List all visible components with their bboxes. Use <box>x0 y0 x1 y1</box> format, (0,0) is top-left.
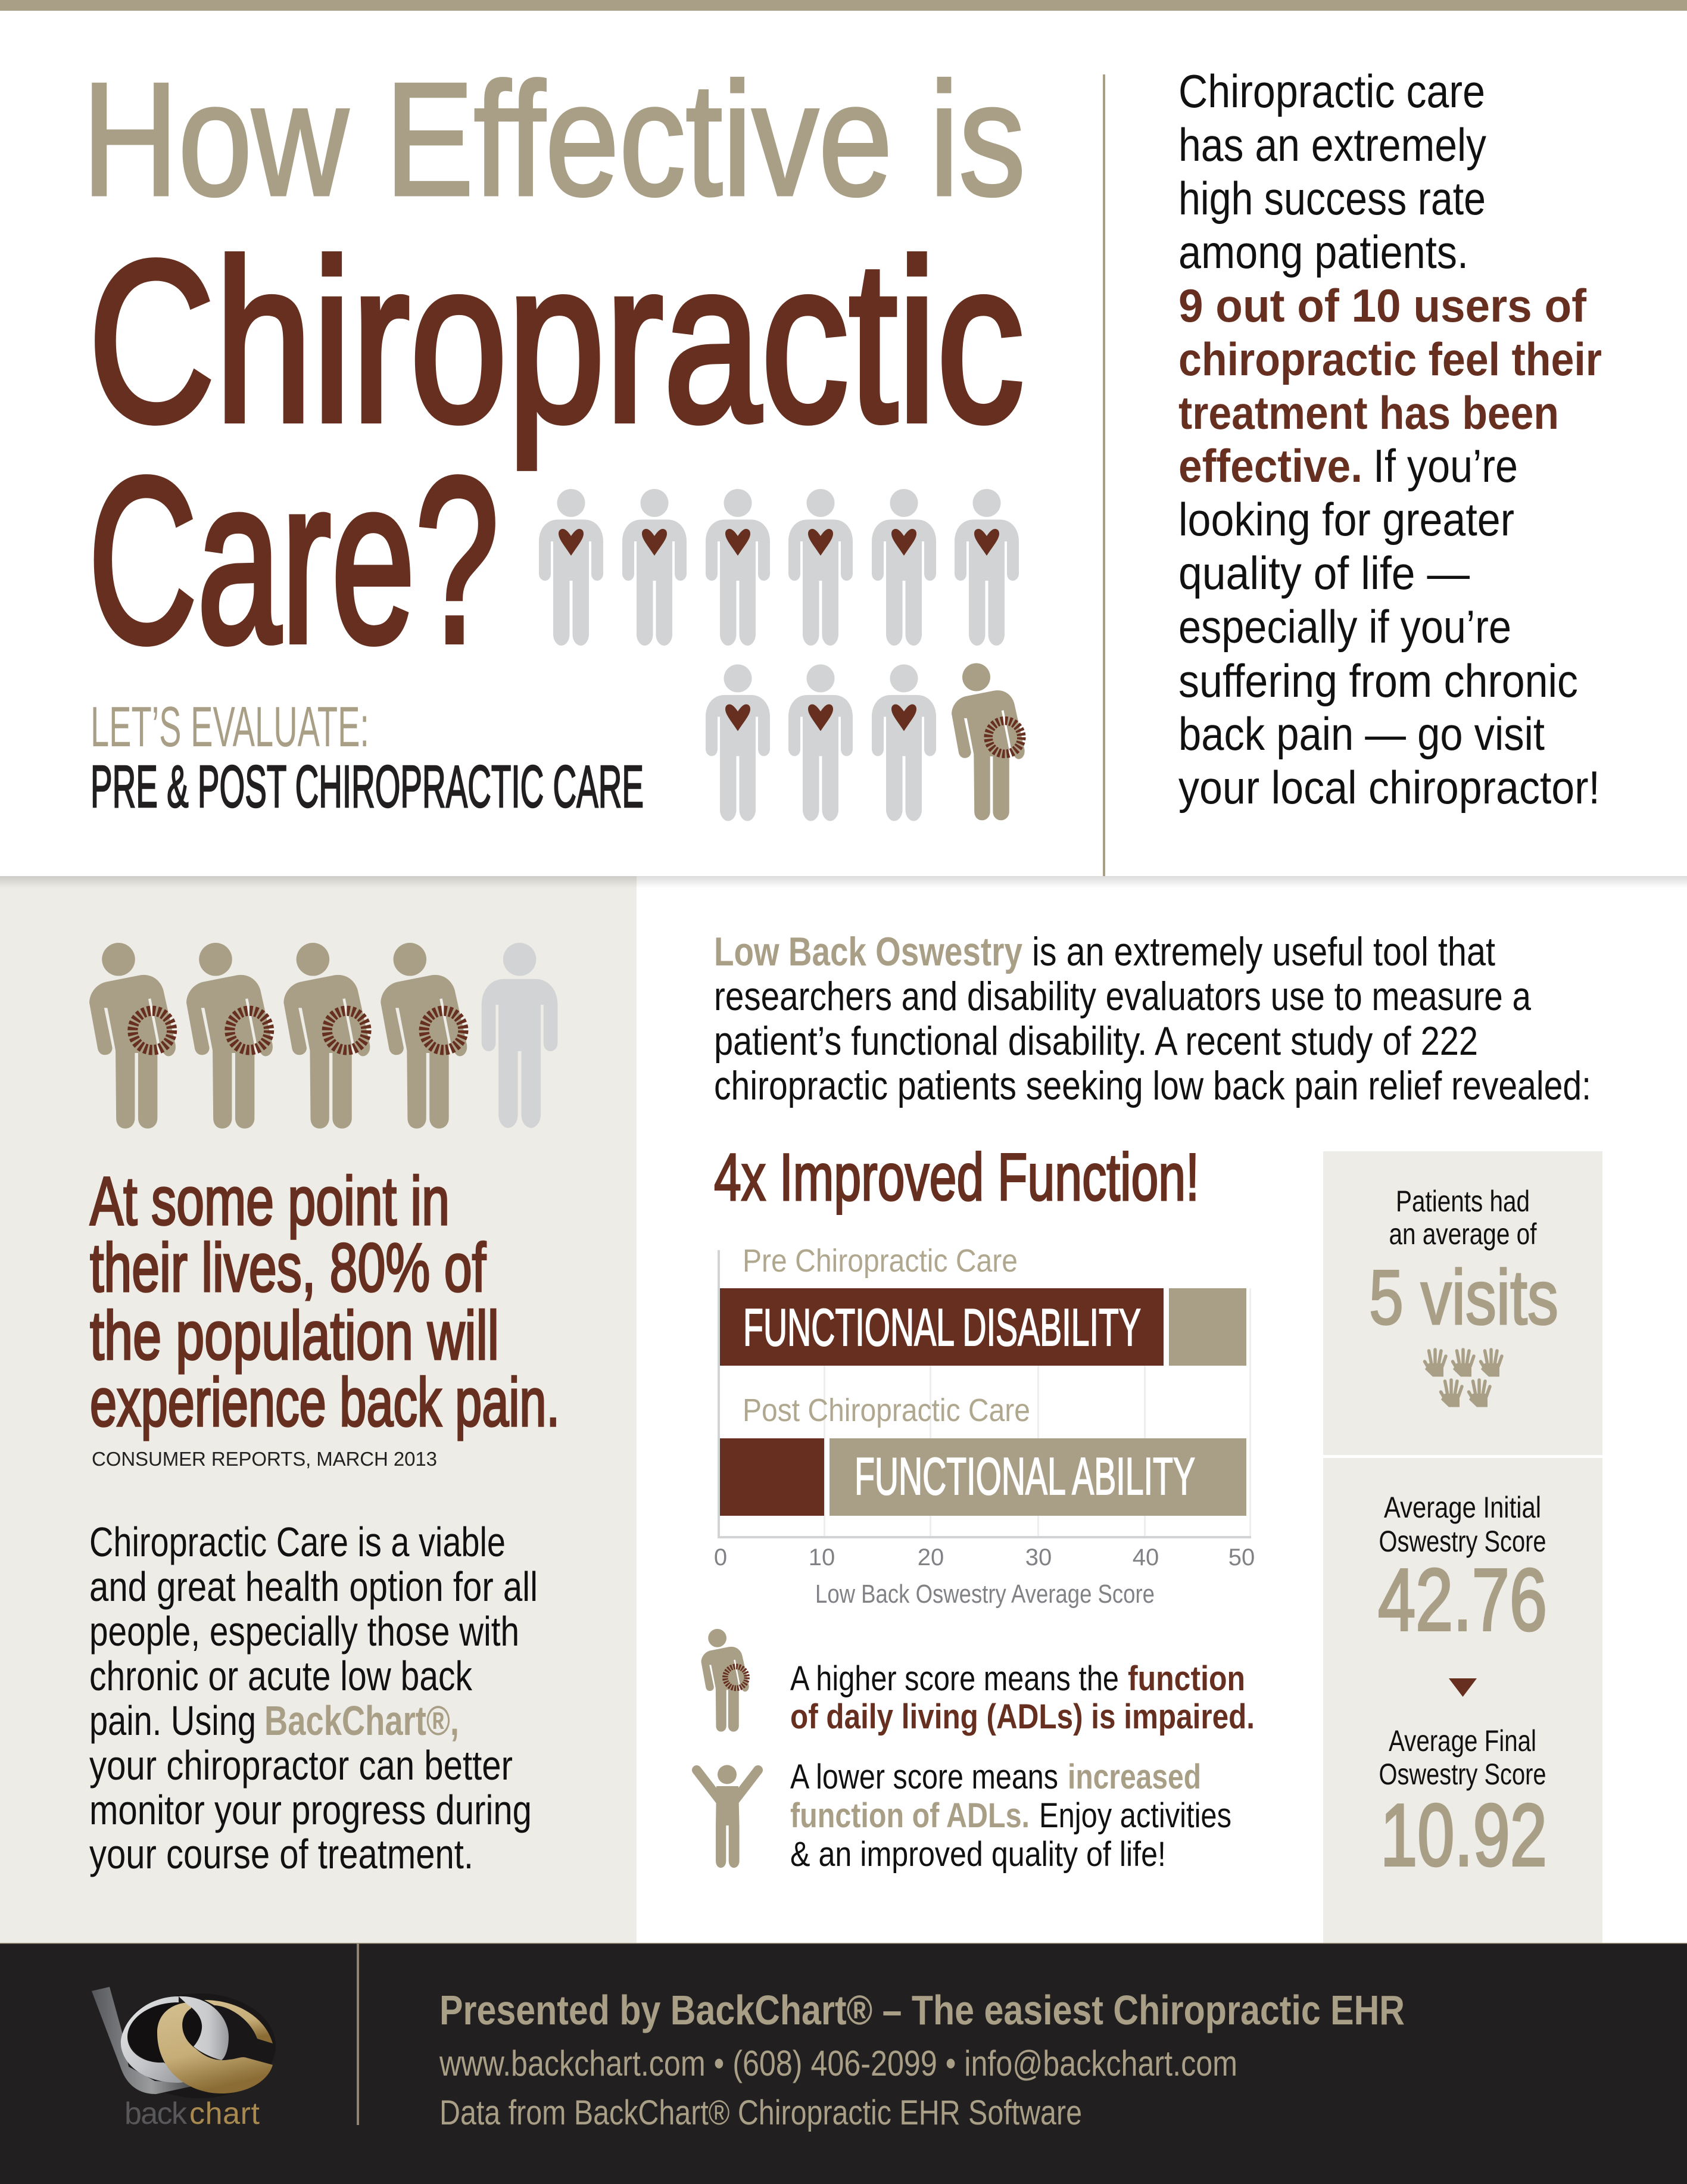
axis tick labels: 20 <box>918 1544 944 1571</box>
body text: BackChart explanation: pain. Using <box>89 1697 256 1744</box>
icon: five hands <box>1424 1350 1502 1407</box>
footer <box>0 1943 1687 2184</box>
stat: 5 visits: 5 visits <box>1369 1254 1558 1341</box>
panel: Oswestry scores: Oswestry Score <box>1379 1525 1546 1558</box>
icon: person with back pain <box>701 1629 749 1732</box>
text: higher score <box>790 1659 1255 1736</box>
logo: backchart <box>92 1987 276 2131</box>
text: lower score: increased <box>1068 1758 1201 1796</box>
stat: final score: 10.92 <box>1380 1786 1547 1884</box>
bar chart: pre and post care <box>714 1243 1255 1609</box>
heading: 80% statistic <box>90 1163 560 1441</box>
intro text block: looking for greater <box>1178 493 1514 546</box>
bar: functional ability <box>720 1438 1246 1516</box>
footer text: Data from BackChart® Chiropractic EHR Software <box>439 2093 1082 2132</box>
intro text block: high success rate <box>1178 172 1486 225</box>
vertical divider <box>1103 74 1105 876</box>
heading: 80% statistic: the population will <box>90 1298 499 1374</box>
text: higher score: function <box>1128 1659 1245 1698</box>
intro text block: If you’re <box>1373 440 1518 492</box>
body text: BackChart explanation: monitor your progress during <box>89 1787 532 1833</box>
title: Care? <box>88 428 499 691</box>
icon row: 9 of 10 patients with hearts, 1 with back pain <box>539 489 1025 821</box>
text: higher score: of daily living (ADLs) is impaired. <box>790 1697 1255 1736</box>
stat: initial score: 42.76 <box>1378 1551 1547 1649</box>
body text: BackChart explanation: Chiropractic Care is a viable <box>89 1519 506 1565</box>
intro text block: quality of life — <box>1178 547 1470 599</box>
intro text block <box>1178 65 1602 814</box>
body text: BackChart explanation: BackChart®, <box>264 1697 459 1744</box>
panel: Oswestry scores <box>1323 1458 1602 1943</box>
text block: Low Back Oswestry intro: is an extremely useful tool that <box>1032 929 1495 974</box>
heading: 80% statistic: At some point in <box>90 1163 450 1239</box>
body text: BackChart explanation: chronic or acute low back <box>89 1653 473 1699</box>
panel: average visits: an average of <box>1389 1217 1537 1251</box>
intro text block: among patients. <box>1178 226 1468 278</box>
footer text <box>439 1987 1405 2132</box>
text: lower score: & an improved quality of life! <box>790 1835 1166 1874</box>
icon: person with arms raised <box>697 1765 758 1868</box>
intro text block: 9 out of 10 users of <box>1178 279 1587 332</box>
panel: Oswestry scores: Oswestry Score <box>1379 1758 1546 1791</box>
text: lower score: function of ADLs. <box>790 1796 1030 1835</box>
text: lower score: A lower score means <box>790 1758 1058 1796</box>
intro text block: Chiropractic care <box>1178 65 1485 117</box>
heading: improved function: 4x Improved Function! <box>714 1140 1199 1214</box>
title: How Effective is <box>82 50 1025 229</box>
intro text block: back pain — go visit <box>1178 708 1545 760</box>
axis title: Low Back Oswestry Average Score <box>815 1579 1155 1609</box>
axis tick labels: 10 <box>809 1544 835 1571</box>
text block: Low Back Oswestry intro: researchers and disability evaluators use to measure a <box>714 974 1531 1019</box>
intro text block: your local chiropractor! <box>1178 761 1600 814</box>
bar: functional ability: FUNCTIONAL ABILITY <box>855 1447 1195 1506</box>
logo: backchart: back <box>124 2096 188 2131</box>
text block: Low Back Oswestry intro: patient’s functional disability. A recent study of 222 <box>714 1018 1478 1064</box>
intro text block: treatment has been <box>1178 387 1559 439</box>
axis tick labels: 40 <box>1133 1544 1159 1571</box>
series label: pre care: Pre Chiropractic Care <box>743 1243 1018 1279</box>
bar: functional disability <box>720 1288 1246 1366</box>
heading: 80% statistic: their lives, 80% of <box>90 1230 487 1306</box>
subtitle: LET’S EVALUATE: <box>91 695 369 759</box>
panel: left back pain statistic <box>0 876 637 1943</box>
text: lower score <box>790 1758 1231 1874</box>
text: lower score: Enjoy activities <box>1039 1796 1231 1835</box>
body text: BackChart explanation: your chiropractor can better <box>89 1742 513 1789</box>
body text: BackChart explanation: and great health option for all <box>89 1563 538 1610</box>
body text: BackChart explanation: people, especially those with <box>89 1608 519 1655</box>
intro text block: has an extremely <box>1178 119 1486 171</box>
panel: average visits: Patients had <box>1396 1185 1530 1218</box>
subtitle: PRE & POST CHIROPRACTIC CARE <box>91 753 644 820</box>
title: Chiropractic <box>88 213 1024 471</box>
intro text block: especially if you’re <box>1178 600 1511 653</box>
intro text block: effective. <box>1178 440 1362 492</box>
axis tick labels: 30 <box>1025 1544 1052 1571</box>
subtitle <box>91 695 644 820</box>
axis tick labels: 50 <box>1228 1544 1255 1571</box>
source note: CONSUMER REPORTS, MARCH 2013 <box>92 1448 437 1470</box>
icon row: 4 of 5 people with back pain <box>89 943 557 1129</box>
heading: 80% statistic: experience back pain. <box>90 1364 560 1441</box>
footer text: Presented by BackChart® – The easiest Chiropractic EHR <box>439 1987 1405 2033</box>
body text: BackChart explanation: your course of treatment. <box>89 1831 473 1877</box>
panel: Oswestry scores: Average Final <box>1389 1724 1536 1758</box>
panel: Oswestry scores: Average Initial <box>1384 1491 1541 1524</box>
axis tick labels <box>714 1544 1255 1571</box>
axis tick labels: 0 <box>714 1544 727 1571</box>
top accent bar <box>0 0 1687 11</box>
icon: down arrow <box>1449 1678 1477 1697</box>
text block: Low Back Oswestry intro: Low Back Oswestry <box>714 929 1022 974</box>
logo: backchart: chart <box>189 2096 260 2131</box>
text block: Low Back Oswestry intro <box>714 929 1591 1108</box>
intro text block: suffering from chronic <box>1178 655 1578 707</box>
footer text: www.backchart.com • (608) 406-2099 • info@backchart.com <box>439 2043 1237 2083</box>
bar: functional disability: FUNCTIONAL DISABILITY <box>743 1298 1141 1357</box>
body text: BackChart explanation <box>89 1519 538 1877</box>
intro text block: chiropractic feel their <box>1178 333 1602 385</box>
series label: post care: Post Chiropractic Care <box>743 1392 1030 1428</box>
text: higher score: A higher score means the <box>790 1659 1119 1698</box>
title <box>82 50 1025 691</box>
panel: average visits <box>1323 1151 1602 1455</box>
